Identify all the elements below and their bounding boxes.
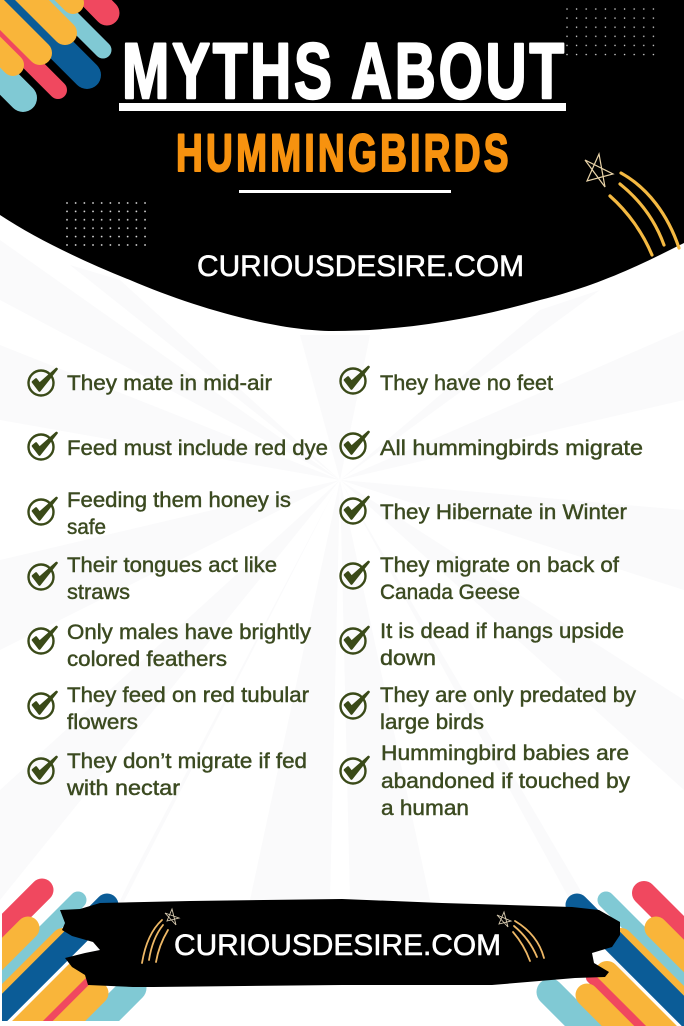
myth: honey: safe [67,516,106,539]
myth: feathers [28,621,312,671]
myth: honey [28,489,291,539]
myth: geese: Canada Geese [380,581,520,604]
myth: mate in mid-air [28,369,272,396]
myth: tongues: straws [67,581,130,604]
subtitle: HUMMINGBIRDS [176,123,509,183]
myths list: right column [340,367,643,820]
myth: geese: They migrate on back of [380,554,619,577]
myth: no feet [340,367,553,395]
background sunburst rays [0,240,684,1026]
myth: honey: Feeding them honey is [67,489,291,512]
myth: all migrate: All hummingbirds migrate [380,437,643,460]
icon: shooting star bottom-left [142,909,179,963]
myth: nectar [28,750,307,800]
myth: feathers: Only males have brightly [67,621,312,644]
myth: tubular flowers: flowers [67,711,138,734]
website heading: CURIOUSDESIRE.COM [197,250,524,283]
myth: upside down [340,620,624,670]
myth: tongues: Their tongues act like [67,554,277,577]
subtitle rule [239,190,451,193]
dots pattern left [66,202,147,247]
myth: nectar: with nectar [66,777,180,800]
myth: hibernate [340,497,627,524]
myth: predators: They are only predated by [380,684,637,707]
footer website text: CURIOUSDESIRE.COM [174,929,501,962]
myth: upside down: down [380,647,436,670]
title underline [119,103,566,111]
icon: shooting star top-right [585,154,679,255]
myth: babies: Hummingbird babies are [381,742,629,765]
myth: babies: a human [381,797,469,820]
myth: geese [340,554,619,604]
myth: upside down: It is dead if hangs upside [380,620,624,643]
myth: predators [340,684,637,734]
myth: feathers: colored feathers [67,648,227,671]
bottom-left colored stripes [0,890,133,1026]
myth: red dye: Feed must include red dye [67,437,328,460]
myth: tubular flowers [28,684,309,734]
dots pattern top-right [566,8,656,57]
myth: babies [340,742,631,820]
myth: tongues [28,554,277,604]
title: MYTHS ABOUT [122,27,564,115]
myth: hibernate: They Hibernate in Winter [380,501,627,524]
myths list: left column [28,369,328,800]
myth: no feet: They have no feet [380,372,553,395]
myth: mate in mid-air: They mate in mid-air [67,372,272,395]
black brush banner [60,899,620,987]
myth: tubular flowers: They feed on red tubular [67,684,309,707]
top-left colored stripes [0,0,107,98]
myth: all migrate [340,432,643,460]
black header shape [0,0,684,331]
bottom-right colored stripes [550,893,684,1026]
myth: nectar: They don’t migrate if fed [67,750,307,773]
icon: shooting star bottom-right [497,912,544,961]
myth: babies: abandoned if touched by [381,770,631,793]
myth: predators: large birds [380,711,484,734]
